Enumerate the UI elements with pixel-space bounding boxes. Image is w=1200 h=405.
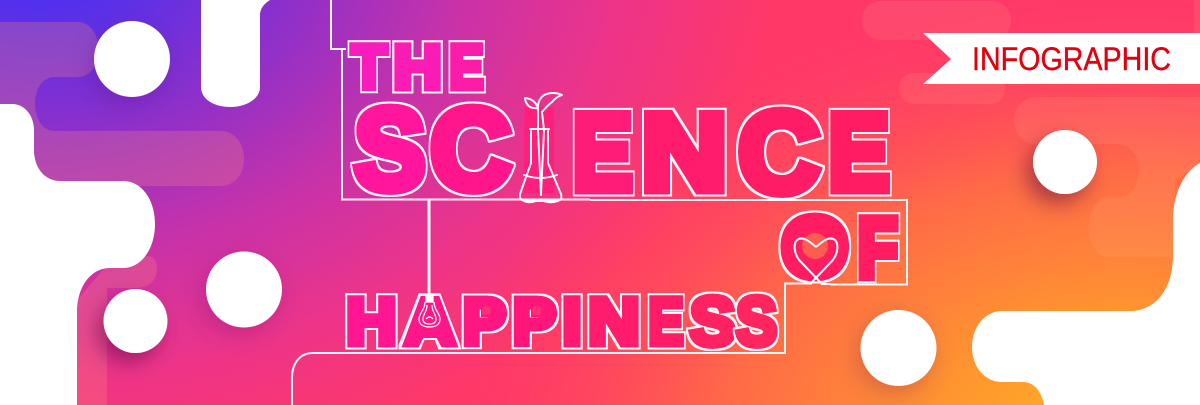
ribbon: infographic bbox=[923, 33, 1200, 84]
panel: white shape bottom right bbox=[972, 163, 1200, 405]
title: of bbox=[782, 200, 898, 295]
letter S: S bbox=[690, 284, 735, 360]
letter E: E bbox=[828, 92, 890, 213]
icon: circle right bbox=[1033, 130, 1097, 194]
icon: circle top left bbox=[94, 21, 170, 97]
letter N: N bbox=[642, 92, 727, 213]
letter P: P bbox=[513, 285, 556, 358]
letter E: E bbox=[450, 33, 483, 101]
letter T: T bbox=[352, 34, 386, 101]
title: science bbox=[354, 80, 890, 220]
letter I: I bbox=[510, 80, 568, 220]
letter N: N bbox=[588, 286, 640, 358]
letter O with heart: O bbox=[782, 200, 848, 294]
letter E: E bbox=[572, 92, 633, 213]
panel: translucent shapes left bbox=[0, 22, 244, 405]
letter E: E bbox=[648, 284, 683, 358]
icon: circle bottom centre bbox=[860, 310, 936, 386]
letter C: C bbox=[430, 85, 511, 214]
panel: translucent shapes right bbox=[862, 0, 1200, 257]
letter F: F bbox=[858, 201, 898, 295]
counter fills for happiness letters bbox=[481, 306, 543, 317]
letter H: H bbox=[346, 286, 397, 359]
letter H: H bbox=[394, 33, 441, 101]
title: the bbox=[352, 33, 483, 101]
letter A: A bbox=[404, 285, 455, 358]
letter P: P bbox=[463, 285, 506, 358]
icon: circle lower left bbox=[104, 289, 168, 353]
letter A body reshaped bbox=[400, 295, 460, 348]
connector lines bbox=[292, 0, 907, 405]
letter C: C bbox=[738, 89, 820, 217]
letter S: S bbox=[736, 283, 777, 360]
ribbon label: INFOGRAPHIC bbox=[972, 41, 1171, 77]
icon: flask with sprout bbox=[520, 93, 562, 202]
panel: white shape left bbox=[0, 104, 155, 405]
panel: white pill top bbox=[201, 0, 270, 107]
icon: light bulb bbox=[419, 295, 440, 327]
letter I: I bbox=[562, 286, 582, 359]
letter S: S bbox=[354, 84, 426, 214]
title: happiness bbox=[346, 283, 777, 360]
icon: circle middle left bbox=[206, 252, 282, 328]
